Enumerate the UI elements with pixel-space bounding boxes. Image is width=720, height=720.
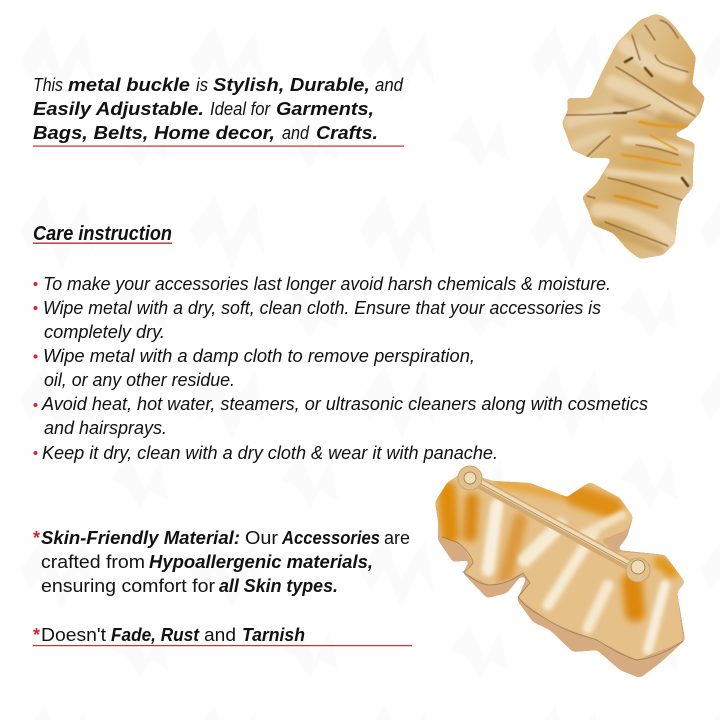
intro text block: This — [33, 75, 63, 95]
intro text block: Easily Adjustable. — [33, 99, 204, 119]
care instruction list — [34, 274, 648, 463]
skin-friendly material note: Accessories — [281, 528, 380, 548]
fade, rust and tarnish note: and — [204, 625, 236, 645]
skin-friendly material note: crafted from — [41, 552, 145, 572]
icon: gold buckle back view with bar — [435, 466, 685, 678]
fade, rust and tarnish note: Doesn't — [41, 625, 106, 645]
care instruction list: and hairsprays. — [44, 418, 167, 438]
care instruction list: Avoid heat, hot water, steamers, or ultrasonic cleaners along with cosmetics — [41, 394, 648, 414]
care instruction list: Wipe metal with a damp cloth to remove perspiration, — [43, 346, 475, 366]
fade, rust and tarnish note: * — [33, 625, 40, 645]
skin-friendly material note: Our — [245, 528, 278, 548]
skin-friendly material note: * — [33, 528, 40, 548]
skin-friendly material note: Skin-Friendly Material: — [41, 528, 240, 548]
skin-friendly material note — [33, 528, 410, 596]
intro text block: Bags, Belts, Home decor, — [33, 123, 275, 143]
icon: gold buckle front view — [562, 14, 705, 259]
care instruction list: To make your accessories last longer avoid harsh chemicals & moisture. — [43, 274, 611, 294]
intro text block — [33, 75, 404, 147]
skin-friendly material note: all Skin types. — [219, 576, 338, 596]
skin-friendly material note: are — [384, 528, 410, 548]
intro text block: metal buckle — [68, 75, 190, 95]
fade, rust and tarnish note: Tarnish — [242, 625, 305, 645]
intro text block: is — [196, 75, 208, 95]
intro text block: Garments, — [276, 99, 374, 119]
intro text block: and — [375, 75, 404, 95]
skin-friendly material note: Hypoallergenic materials, — [149, 552, 373, 572]
intro text block: and — [282, 123, 310, 143]
intro text block: Ideal for — [210, 99, 271, 119]
fade, rust and tarnish note — [33, 625, 412, 646]
heading: care instruction: Care instruction — [33, 223, 172, 245]
fade, rust and tarnish note: Fade, Rust — [111, 625, 200, 645]
care instruction list: Keep it dry, clean with a dry cloth & wear it with panache. — [42, 443, 498, 463]
care instruction list: oil, or any other residue. — [44, 370, 235, 390]
intro text block: Stylish, Durable, — [213, 75, 370, 95]
intro text block: Crafts. — [316, 123, 378, 143]
care instruction list: Wipe metal with a dry, soft, clean cloth. Ensure that your accessories is — [43, 298, 601, 318]
care instruction list: completely dry. — [44, 322, 165, 342]
skin-friendly material note: ensuring comfort for — [41, 576, 215, 596]
